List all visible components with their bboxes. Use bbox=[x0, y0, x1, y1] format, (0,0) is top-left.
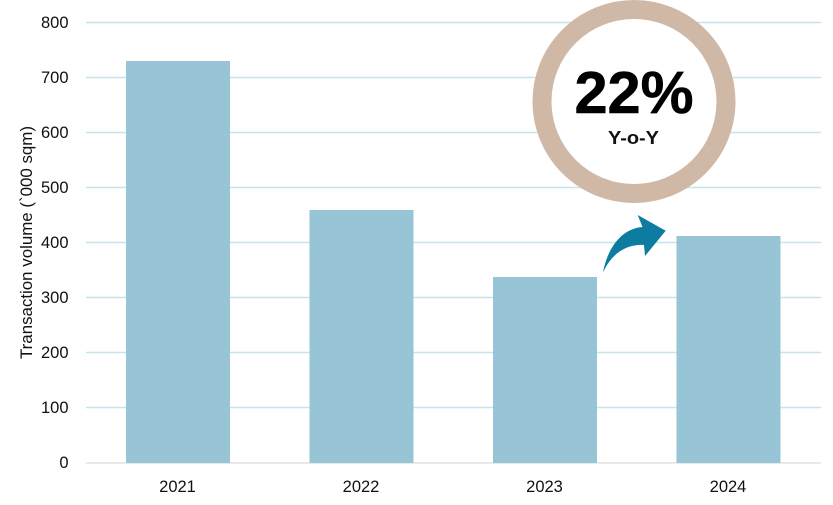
y-axis labels: 200 bbox=[41, 344, 68, 362]
bars bbox=[126, 61, 780, 463]
y-axis title: Transaction volume (`000 sqm) bbox=[18, 126, 36, 359]
y-axis labels bbox=[41, 14, 68, 472]
callout: 22% year-on-year ring bbox=[542, 10, 726, 194]
x-axis labels: 2022 bbox=[343, 478, 379, 496]
callout: 22% year-on-year ring: 22% bbox=[574, 59, 694, 126]
y-axis labels: 100 bbox=[41, 399, 68, 417]
callout: 22% year-on-year ring: Y-o-Y bbox=[608, 128, 659, 148]
y-axis labels: 700 bbox=[41, 69, 68, 87]
y-axis labels: 400 bbox=[41, 234, 68, 252]
y-axis labels: 600 bbox=[41, 124, 68, 142]
x-axis labels: 2024 bbox=[710, 478, 746, 496]
x-axis labels bbox=[159, 478, 746, 496]
y-axis labels: 300 bbox=[41, 289, 68, 307]
y-axis labels: 0 bbox=[59, 454, 68, 472]
x-axis labels: 2021 bbox=[159, 478, 196, 496]
arrow: growth from 2023 to 2024 bbox=[603, 215, 666, 273]
x-axis labels: 2023 bbox=[526, 478, 563, 496]
y-axis labels: 800 bbox=[41, 14, 68, 32]
y-axis labels: 500 bbox=[41, 179, 68, 197]
